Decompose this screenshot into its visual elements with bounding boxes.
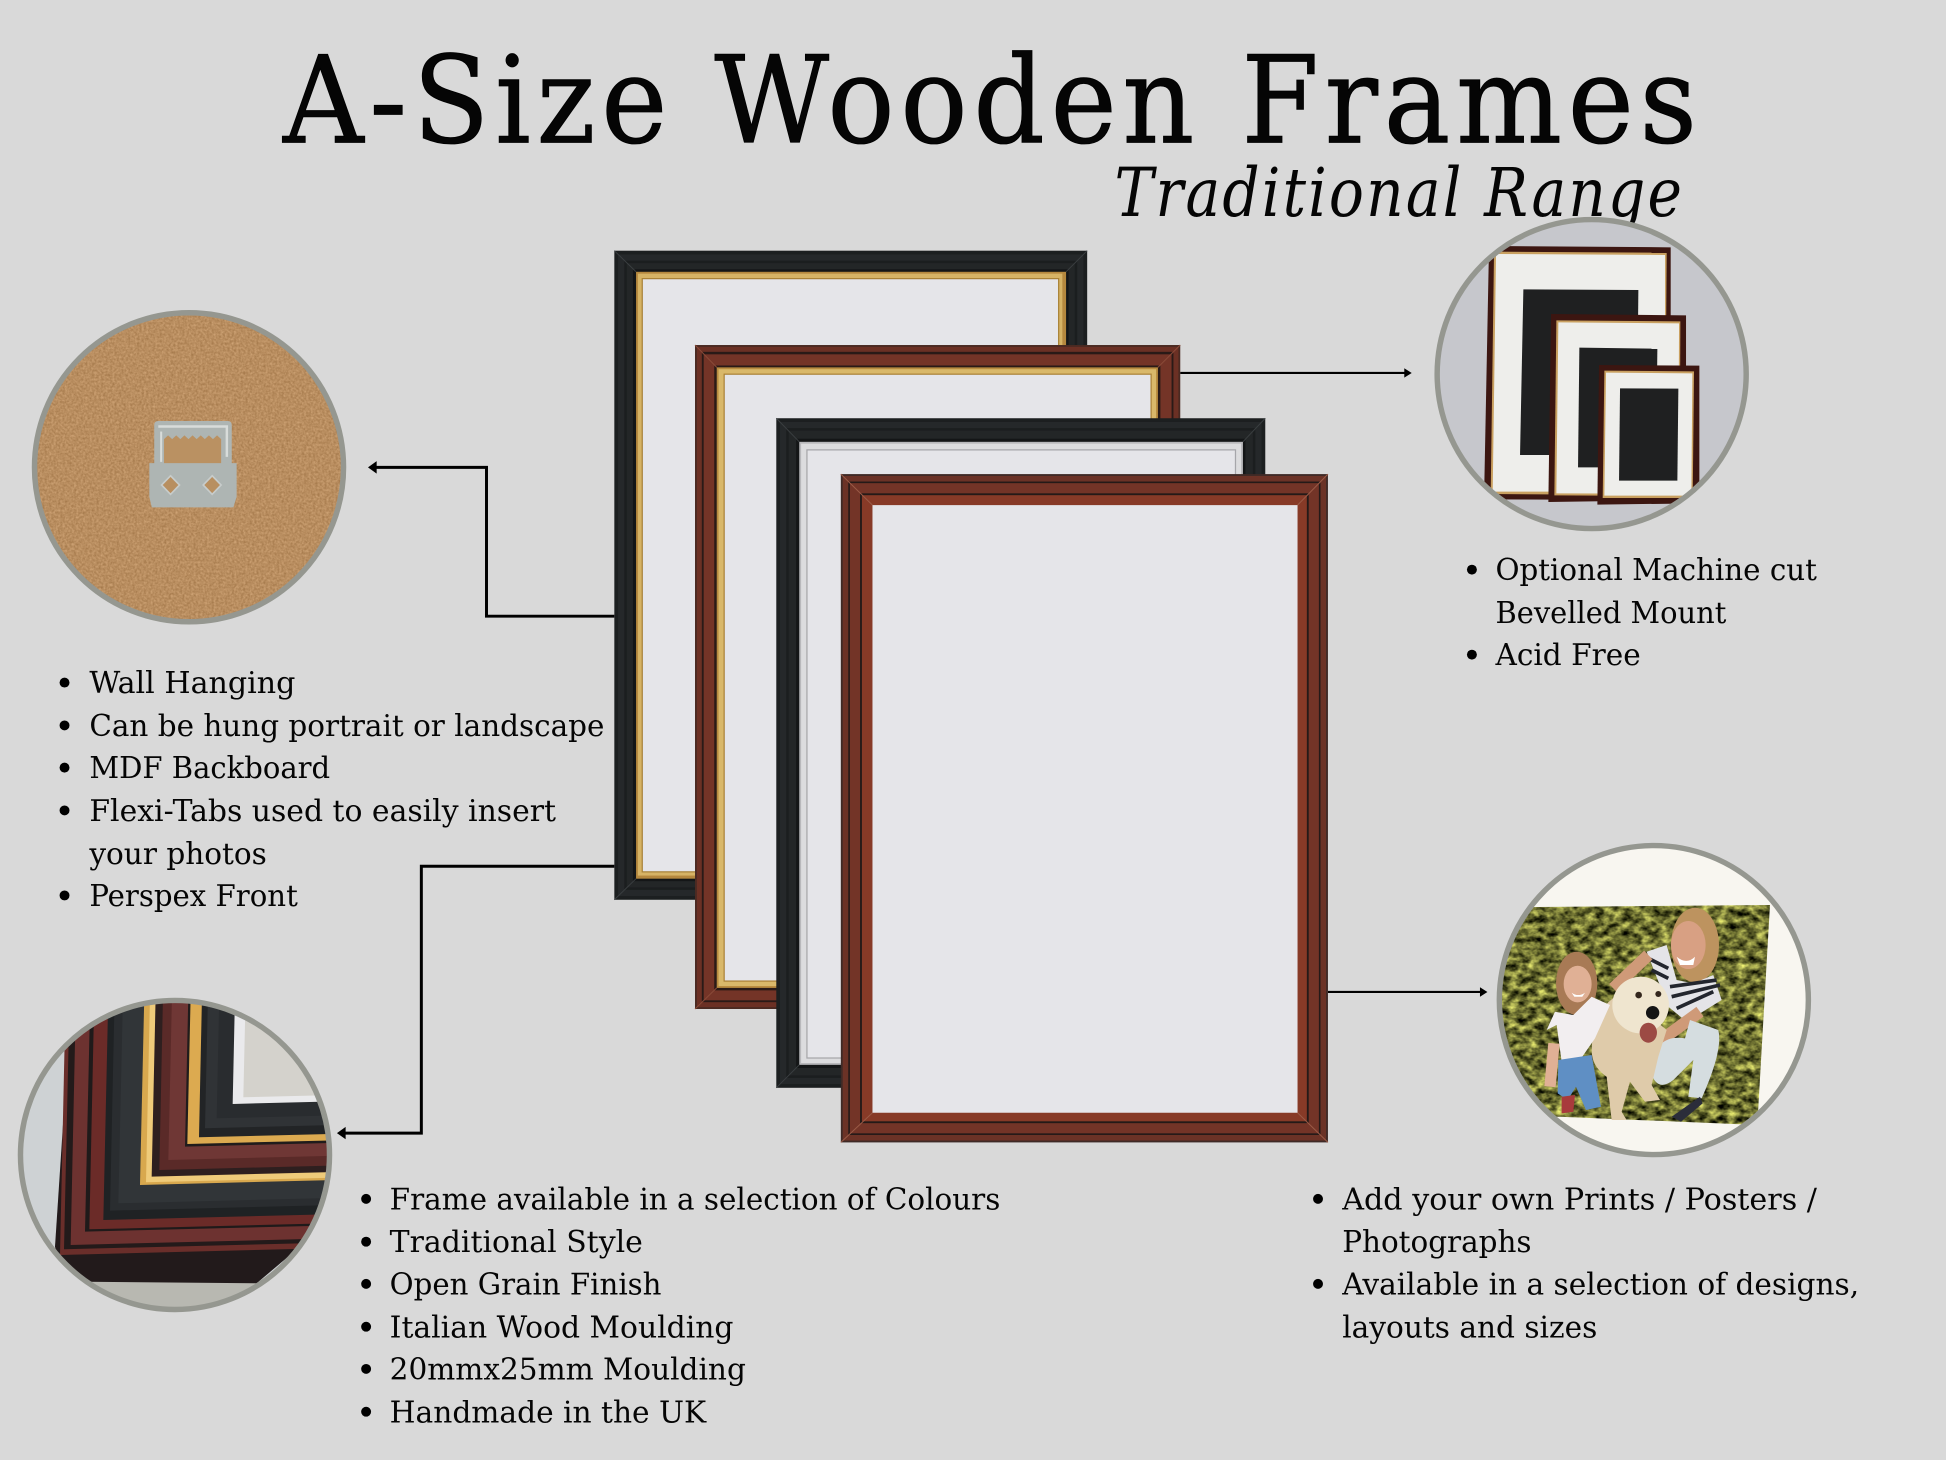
circle border bbox=[35, 313, 344, 622]
text block: wall hanging features: Perspex Front bbox=[89, 879, 298, 914]
text block: wall hanging features: Wall Hanging bbox=[89, 666, 295, 701]
black frame with gold slip bbox=[614, 251, 1087, 900]
arrow: frames to moulding circle bbox=[337, 866, 614, 1139]
circle border bbox=[1437, 220, 1746, 529]
text block: wall hanging features: your photos bbox=[88, 837, 267, 872]
text block: wall hanging features: Flexi-Tabs used to easily insert bbox=[89, 794, 556, 829]
text block: wall hanging features: MDF Backboard bbox=[89, 751, 330, 786]
circle: wall hanging backboard bbox=[34, 312, 344, 622]
stacked frame corners bbox=[24, 1003, 327, 1307]
text block: wall hanging features bbox=[60, 666, 604, 914]
walnut frame front bbox=[841, 474, 1328, 1142]
text block: moulding features: Frame available in a selection of Colours bbox=[390, 1182, 1000, 1217]
text block: print features: Available in a selection of designs, bbox=[1341, 1267, 1859, 1302]
text block: mount features: Bevelled Mount bbox=[1495, 596, 1726, 631]
circle: family photo print bbox=[1496, 842, 1812, 1158]
text block: moulding features: 20mmx25mm Moulding bbox=[390, 1352, 746, 1387]
MDF backboard texture bbox=[34, 312, 344, 622]
text block: print features bbox=[1313, 1182, 1859, 1345]
text block: moulding features: Italian Wood Moulding bbox=[390, 1310, 733, 1345]
text block: mount features bbox=[1467, 553, 1817, 673]
text block: moulding features: Traditional Style bbox=[390, 1225, 643, 1260]
icon: sawtooth hanger bbox=[149, 421, 237, 507]
text block: print features: Photographs bbox=[1342, 1225, 1531, 1260]
arrow: frames to mount circle bbox=[1180, 368, 1412, 378]
text block: moulding features bbox=[361, 1182, 1000, 1430]
text block: wall hanging features: Can be hung portrait or landscape bbox=[89, 709, 604, 744]
text block: print features: Add your own Prints / Posters / bbox=[1341, 1182, 1818, 1217]
arrow: frames to photo circle bbox=[1328, 987, 1487, 997]
text block: moulding features: Handmade in the UK bbox=[390, 1395, 707, 1430]
subtitle: Traditional Range bbox=[1114, 154, 1684, 232]
arrow: frames to wall hanging circle bbox=[368, 461, 614, 616]
text block: mount features: Acid Free bbox=[1494, 638, 1641, 673]
mounted frames photo bbox=[1440, 222, 1744, 526]
circle border bbox=[1499, 846, 1808, 1155]
text block: print features: layouts and sizes bbox=[1342, 1310, 1597, 1345]
girl bbox=[1556, 952, 1597, 1015]
circle: mounted frames bbox=[1434, 216, 1749, 532]
dog bbox=[1592, 993, 1667, 1120]
woman bbox=[1671, 908, 1719, 982]
title: A-Size Wooden Frames bbox=[282, 32, 1703, 172]
walnut frame with gold slip bbox=[695, 345, 1180, 1009]
black frame with silver slip bbox=[776, 418, 1265, 1088]
circle: moulding corner detail bbox=[18, 998, 332, 1312]
text block: moulding features: Open Grain Finish bbox=[390, 1267, 661, 1302]
photo of mother, daughter and dog bbox=[1502, 848, 1806, 1152]
circle border bbox=[20, 1000, 330, 1309]
text block: mount features: Optional Machine cut bbox=[1495, 553, 1817, 588]
